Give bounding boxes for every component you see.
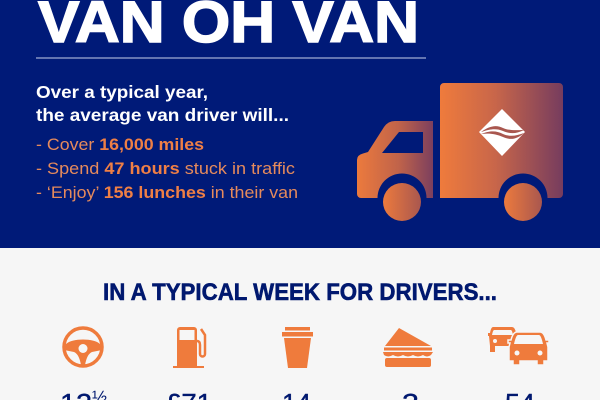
weekly numbers [60, 388, 535, 400]
icon: delivery truck [357, 83, 563, 221]
logo diamond [479, 109, 525, 156]
title rule [36, 58, 426, 59]
front car [508, 332, 549, 365]
icon: steering wheel [64, 328, 102, 366]
front wheel [383, 183, 421, 221]
rear wheel [504, 183, 542, 221]
stat list: - ‘Enjoy’ 156 lunches in their van [36, 184, 298, 202]
stat list [36, 136, 298, 202]
section heading: IN A TYPICAL WEEK FOR DRIVERS... [103, 279, 497, 306]
cab window [382, 132, 423, 153]
stat list: - Cover 16,000 miles [36, 136, 204, 154]
back car [488, 327, 518, 352]
icon: coffee cup [282, 327, 313, 368]
icon: traffic cars [488, 327, 549, 365]
intro text [36, 82, 289, 125]
stat list: - Spend 47 hours stuck in traffic [36, 160, 295, 178]
truck box [440, 83, 563, 198]
panel: weekly section [0, 248, 600, 400]
icon: sandwich [383, 328, 433, 367]
icon: fuel pump [173, 327, 205, 368]
truck cab [357, 121, 433, 198]
panel: navy header [0, 0, 600, 248]
intro text: Over a typical year, [36, 82, 208, 102]
intro text: the average van driver will... [36, 105, 289, 125]
